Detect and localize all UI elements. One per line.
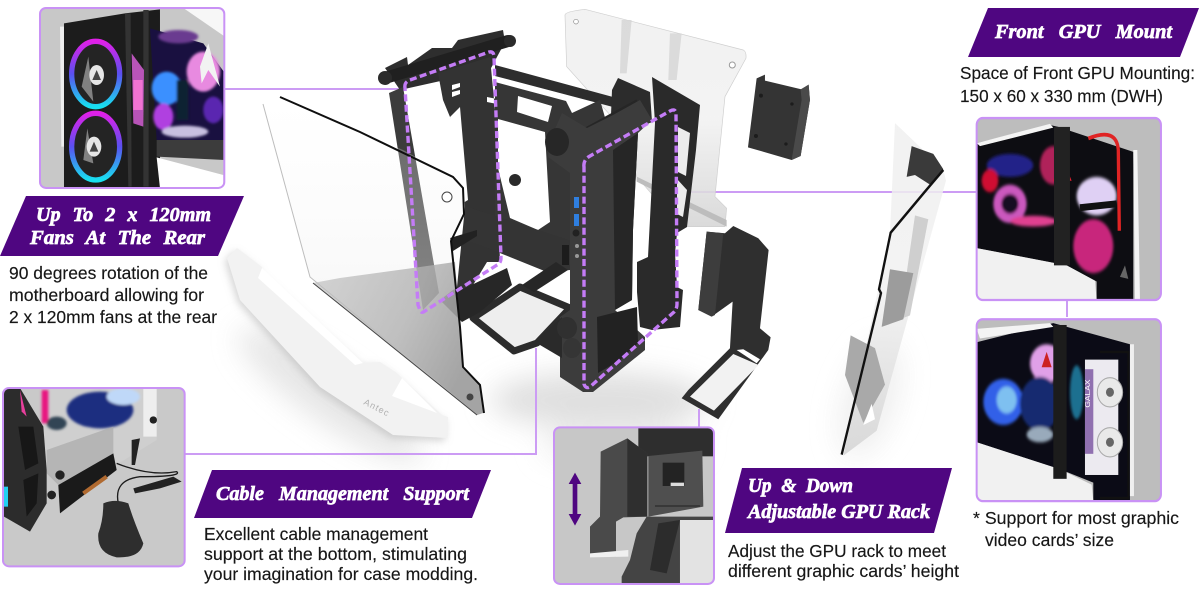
banner: front GPU heading: Front GPU Mount	[994, 21, 1173, 43]
banner: GPU rack heading	[725, 468, 952, 533]
panel: front GPU photo two: GALAX	[1083, 379, 1092, 408]
rear left strut	[389, 87, 439, 310]
bottom tray	[473, 287, 570, 351]
text: video card footnote: * Support for most graphic	[973, 508, 1179, 528]
text: GPU rack description: different graphic cards’ height	[728, 561, 959, 581]
rear wing	[637, 77, 700, 330]
panel: rear fans photo	[40, 8, 225, 188]
left glass panel	[263, 97, 484, 415]
banner: front GPU heading	[968, 8, 1199, 57]
text: front GPU description: 150 x 60 x 330 mm (DWH)	[960, 86, 1163, 106]
case frame	[378, 30, 700, 392]
text: GPU rack description	[728, 541, 959, 581]
banner: cable management heading: Cable Management Support	[216, 483, 470, 505]
brand mark: Antec	[362, 397, 392, 419]
front column	[610, 78, 652, 140]
centre plate	[495, 82, 610, 267]
banner: GPU rack heading: Adjustable GPU Rack	[746, 501, 930, 523]
banner: rear fans heading	[0, 196, 244, 256]
banner: cable management heading	[194, 470, 491, 518]
text: rear fans description	[9, 263, 217, 327]
cable and mouse	[117, 463, 178, 503]
text: rear fans description: 90 degrees rotation of the	[9, 263, 208, 283]
cross bar	[465, 206, 575, 272]
text: cable management description: Excellent cable management	[204, 524, 428, 544]
banner: rear fans heading: Fans At The Rear	[29, 227, 205, 249]
text: video card footnote: video cards’ size	[985, 530, 1114, 550]
rear plate	[438, 57, 500, 300]
banner: rear fans heading: Up To 2 x 120mm	[36, 204, 211, 226]
right side glass panel	[842, 123, 946, 456]
text: front GPU description: Space of Front GPU Mounting:	[960, 63, 1195, 83]
floor shadows	[224, 309, 913, 481]
text: rear fans description: motherboard allowing for	[9, 285, 204, 305]
panel: front GPU photo one	[977, 118, 1161, 300]
connector lines	[185, 89, 1067, 454]
fans	[72, 41, 120, 180]
text: video card footnote	[973, 508, 1179, 550]
rear glass panel	[565, 9, 746, 227]
rear top rods	[378, 30, 516, 90]
banner: GPU rack heading: Up & Down	[748, 475, 853, 497]
text: GPU rack description: Adjust the GPU rack to meet	[728, 541, 946, 561]
text: cable management description: your imagination for case modding.	[204, 564, 478, 584]
icon: up-down arrow	[569, 473, 581, 526]
white front bezel	[225, 248, 448, 441]
text: front GPU description	[960, 63, 1195, 106]
top beam	[495, 65, 613, 107]
text: cable management description	[204, 524, 478, 584]
front I/O ports	[562, 197, 580, 265]
purple dashed outlines	[405, 52, 677, 388]
text: cable management description: support at the bottom, stimulating	[204, 544, 467, 564]
text: rear fans description: 2 x 120mm fans at the rear	[9, 307, 217, 327]
side bracket part	[748, 75, 810, 160]
GPU rack part	[682, 226, 771, 419]
colourful interior	[150, 28, 225, 140]
panel: front GPU photo two	[977, 319, 1161, 501]
panel: GPU rack photo	[554, 427, 714, 584]
panel: cable management photo	[3, 388, 185, 566]
